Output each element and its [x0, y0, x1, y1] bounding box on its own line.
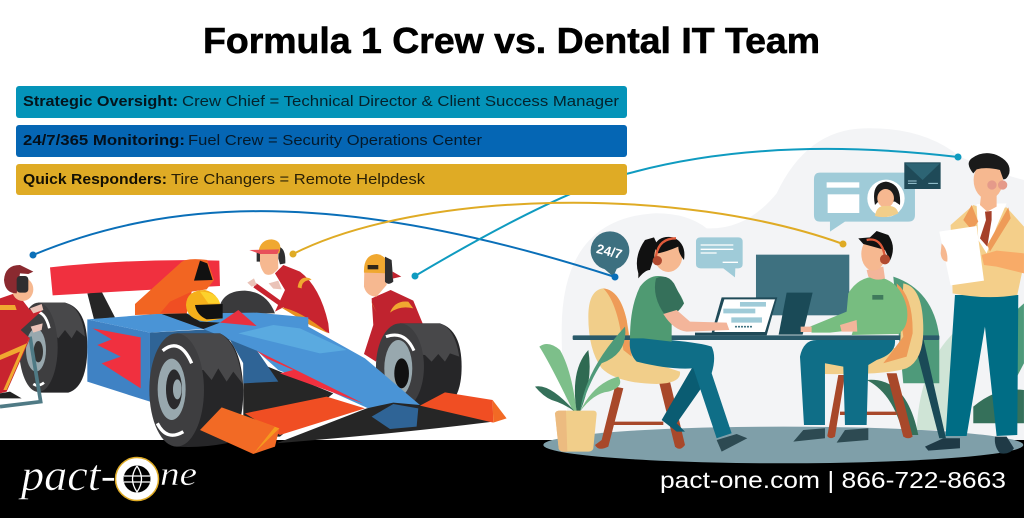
logo: pact-one: pact- [18, 451, 116, 500]
seated man agent [793, 231, 907, 443]
laptop [695, 297, 777, 335]
right crew member [364, 254, 423, 362]
floor [543, 427, 1023, 463]
front wing end plate [200, 407, 279, 454]
monitor [756, 255, 849, 315]
title: Formula 1 Crew vs. Dental IT Team [203, 20, 820, 61]
front wing and nose [245, 392, 507, 443]
row: 24/7/365 monitoring: Fuel Crew = Security Operations Center [188, 132, 482, 149]
row: 24/7/365 monitoring [16, 125, 627, 157]
office scene illustration [535, 128, 1024, 463]
seated woman agent [630, 237, 747, 452]
teal connector [412, 149, 962, 280]
scene background blob [562, 128, 1024, 440]
left crew member [0, 265, 43, 407]
row: quick responders [16, 164, 627, 195]
front left wheel [149, 333, 243, 447]
rear wing [50, 259, 220, 319]
far rear wheel [218, 291, 275, 313]
background plant [867, 277, 1024, 435]
row: quick responders: Quick Responders: [23, 171, 167, 188]
small chat bubble [696, 237, 743, 277]
large chat bubble [814, 173, 915, 232]
race car and pit crew illustration [0, 239, 507, 454]
row: 24/7/365 monitoring: 24/7/365 Monitoring: [23, 132, 185, 149]
row: strategic oversight: Strategic Oversight: [23, 93, 178, 110]
row: quick responders: Tire Changers = Remote Helpdesk [171, 171, 426, 188]
right rear wheel [376, 323, 462, 410]
table [573, 335, 946, 438]
row: strategic oversight: Crew Chief = Technical Director & Client Success Manager [182, 93, 619, 110]
logo: pact-one [18, 451, 197, 500]
car body [87, 310, 420, 437]
left rear wheel [19, 303, 87, 393]
footer band [0, 440, 1024, 518]
driver helmet [186, 290, 223, 322]
yellow connector [290, 203, 846, 258]
right chair [825, 283, 923, 438]
front plant in pot [535, 327, 625, 452]
24/7 bubble: 24/7 [595, 241, 624, 262]
logo: pact-one: ne [160, 456, 197, 493]
blue connector [30, 211, 618, 280]
envelope icon [904, 162, 941, 189]
standing man [925, 153, 1024, 454]
connector lines [30, 149, 962, 280]
contact line: pact-one.com | 866-722-8663 [660, 467, 1006, 493]
24/7 bubble [591, 231, 629, 277]
left chair [588, 288, 685, 449]
middle crew member leaning [247, 239, 329, 333]
laptop back [779, 293, 813, 335]
row: strategic oversight [16, 86, 627, 118]
